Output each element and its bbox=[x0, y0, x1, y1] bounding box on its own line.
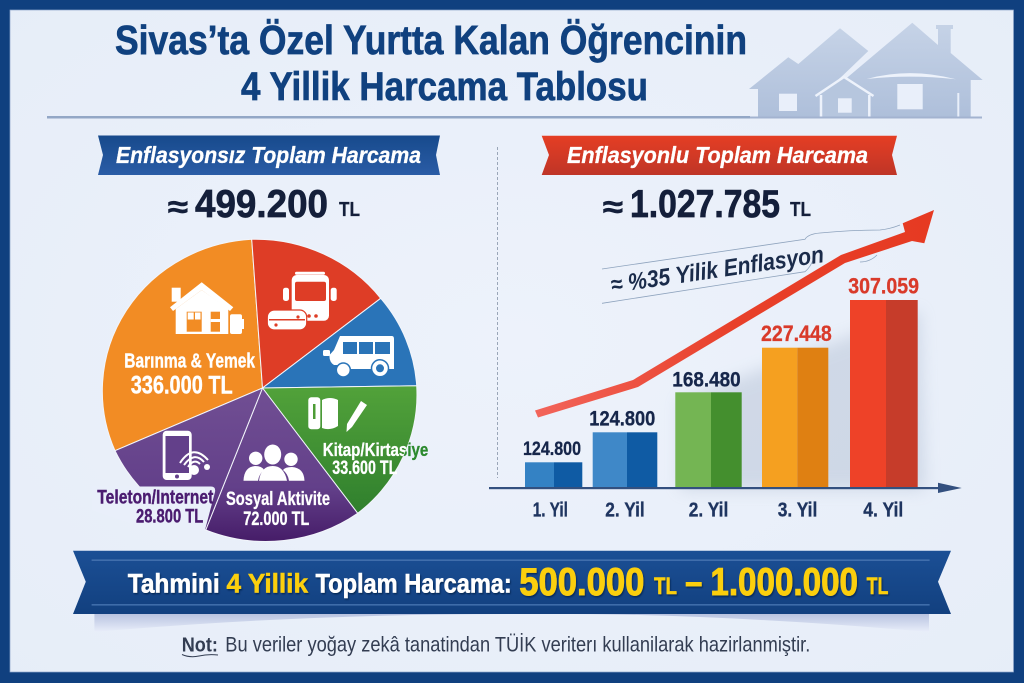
icon: house bbox=[170, 282, 244, 334]
bar: year 2 bbox=[589, 406, 657, 488]
banner text: Toplam Harcama: bbox=[316, 568, 512, 598]
heading ribbon: inflation bbox=[542, 136, 897, 175]
title: Sivas’ta Özel Yurtta Kalan Öğrencinin bbox=[115, 17, 747, 63]
callout: annual inflation bbox=[602, 225, 900, 303]
heading ribbon: inflation: Enflasyonlu Toplam Harcama bbox=[567, 142, 868, 168]
total: 1.027.785 TL: ≈ bbox=[603, 191, 623, 224]
axis labels: 1. Yil bbox=[533, 500, 568, 522]
bar: year 3 bbox=[672, 368, 742, 488]
bar shading bbox=[680, 310, 925, 490]
total: 499.200 TL: TL bbox=[339, 199, 360, 221]
banner shadow bbox=[94, 614, 929, 632]
total: 1.027.785 TL: TL bbox=[790, 199, 811, 221]
axis arrow bbox=[489, 483, 962, 493]
callout: annual inflation: ≈ %35 Yilik Enflasyon bbox=[609, 241, 826, 299]
bar: year 2: 124.800 bbox=[589, 406, 655, 430]
label: social activity: Sosyal Aktivite bbox=[226, 488, 330, 510]
bar: year 3: 168.480 bbox=[672, 368, 741, 392]
icon: bus front and lunch box bbox=[267, 272, 337, 330]
pie chart bbox=[92, 239, 428, 542]
bar: year 1: 124.800 bbox=[523, 438, 581, 460]
heading ribbon: inflation-free bbox=[98, 136, 440, 175]
axis labels: 2. Yil bbox=[689, 500, 728, 522]
bar: year 5: 307.059 bbox=[848, 273, 919, 298]
banner text: 4 Yillik bbox=[226, 568, 309, 598]
banner text: 500.000 bbox=[519, 561, 644, 604]
icon: phone with wifi bbox=[163, 431, 210, 480]
icon: houses illustration bbox=[749, 23, 983, 119]
axis labels bbox=[533, 500, 903, 522]
panel: inflation spending bbox=[489, 136, 962, 522]
panel divider bbox=[496, 147, 498, 478]
label: housing and food: 336.000 TL bbox=[131, 371, 233, 399]
title underline bbox=[47, 116, 750, 118]
banner ribbon bbox=[73, 551, 951, 614]
title: 4 Yillik Harcama Tablosu bbox=[241, 65, 648, 109]
label: books and stationery: Kitap/Kirtasiye bbox=[323, 440, 428, 460]
slice: transport blue bbox=[262, 298, 417, 388]
label: books and stationery bbox=[324, 442, 428, 474]
axis labels: 2. Yil bbox=[605, 500, 645, 522]
slice: books bbox=[262, 386, 417, 513]
axis labels: 3. Yil bbox=[778, 500, 817, 522]
label: social activity bbox=[226, 488, 330, 530]
bar: year 4: 227.448 bbox=[761, 321, 832, 346]
arrow: rising trend bbox=[535, 210, 934, 418]
banner text bbox=[128, 561, 888, 604]
footnote: Bu veriler yoğay zekâ tanatindan TÜİK veriterı kullanilarak hazirlanmiştir. bbox=[225, 634, 810, 657]
slice: phone and internet bbox=[115, 388, 262, 530]
total: 1.027.785 TL: 1.027.785 bbox=[630, 183, 780, 226]
label backing: phone and internet bbox=[92, 486, 215, 530]
panel: inflation-free spending bbox=[92, 136, 440, 542]
label: phone and internet: Teleton/Internet bbox=[97, 486, 214, 508]
banner text: TL bbox=[654, 573, 677, 600]
banner text: Tahmini bbox=[128, 568, 220, 598]
label: housing and food bbox=[124, 350, 256, 399]
banner text: TL bbox=[867, 573, 888, 600]
label: books and stationery: 33.600 TL bbox=[332, 458, 398, 479]
icon: minibus bbox=[323, 336, 394, 377]
bar: year 5 bbox=[848, 273, 919, 488]
label: books and stationery: Kitap/Kirtasiye bbox=[323, 440, 428, 460]
axis labels: 4. Yil bbox=[863, 500, 903, 522]
title bbox=[115, 17, 747, 109]
slice: transport red bbox=[252, 239, 381, 388]
bar: year 4 bbox=[761, 321, 832, 488]
slice: housing and food bbox=[102, 239, 262, 451]
label: phone and internet: 28.800 TL bbox=[136, 506, 203, 528]
summary banner bbox=[73, 551, 951, 632]
slice: social bbox=[206, 388, 358, 542]
label: phone and internet bbox=[97, 486, 214, 528]
icon: book and pencil bbox=[308, 397, 367, 432]
total: 499.200 TL: ≈ bbox=[168, 191, 188, 224]
label: housing and food: Barınma & Yemek bbox=[124, 350, 256, 372]
icon: group of people bbox=[244, 444, 304, 481]
heading ribbon: inflation-free: Enflasyonsız Toplam Harcama bbox=[116, 142, 421, 168]
bar: year 1 bbox=[523, 438, 582, 488]
banner text: 1.000.000 bbox=[710, 561, 858, 604]
label: social activity: 72.000 TL bbox=[243, 508, 309, 530]
footnote: Not: bbox=[182, 635, 218, 657]
bar chart bbox=[489, 273, 962, 522]
total: 499.200 TL: 499.200 bbox=[195, 183, 328, 226]
